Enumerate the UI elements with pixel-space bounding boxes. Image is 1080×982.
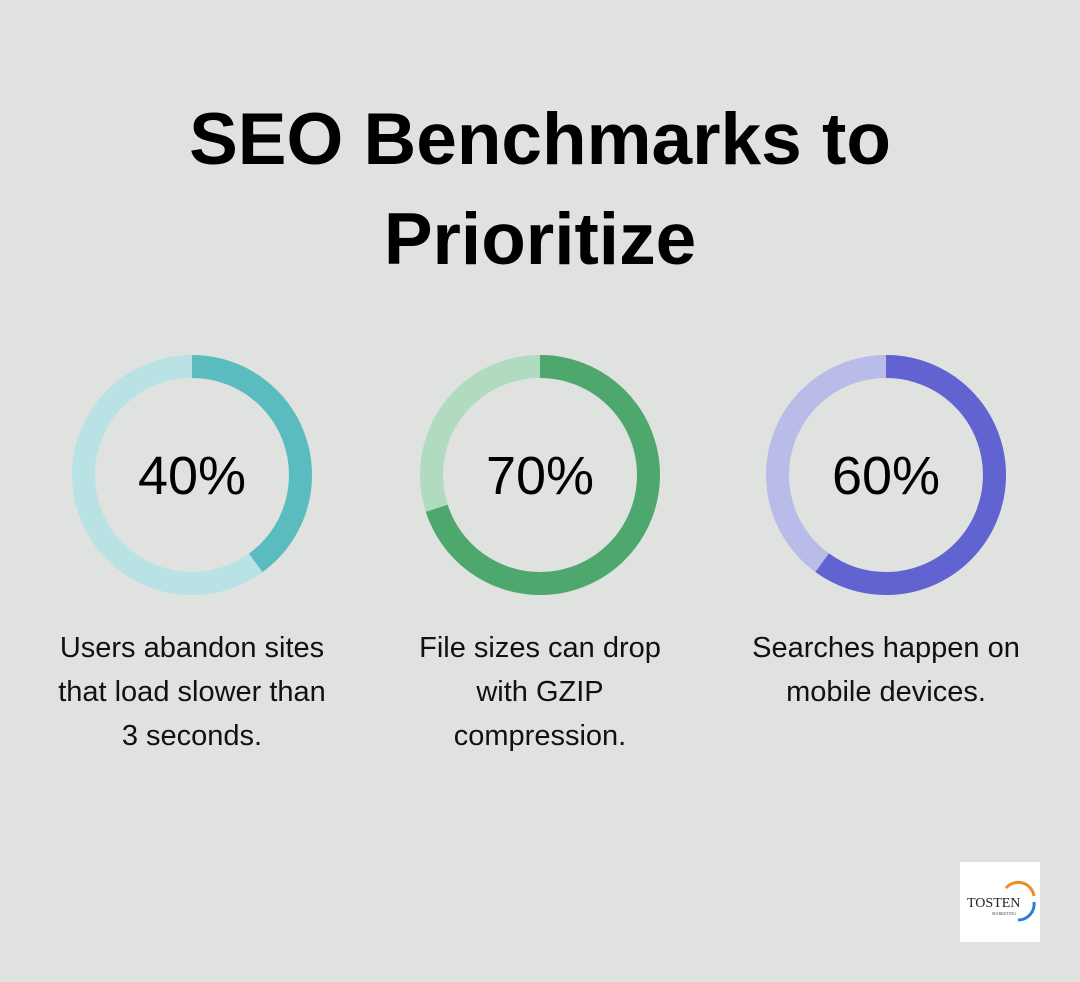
donut: 70% — [432, 366, 648, 584]
logo: TOSTEN — [967, 896, 1020, 911]
logo: MARKETING — [992, 911, 1016, 916]
donut: 40%: 40% — [138, 446, 246, 506]
title: SEO Benchmarks to — [189, 99, 891, 180]
logo — [960, 862, 1040, 942]
description 2: File sizes can drop with GZIP compression. — [419, 632, 661, 752]
title: Prioritize — [384, 199, 696, 280]
description 1: Users abandon sites that load slower than 3 seconds. — [58, 632, 326, 752]
title — [189, 99, 891, 280]
donut: 60%: 60% — [832, 446, 940, 506]
donut: 40% — [84, 366, 300, 584]
donut: 60% — [778, 366, 994, 584]
donut: 70%: 70% — [486, 446, 594, 506]
description 3: Searches happen on mobile devices. — [752, 632, 1020, 708]
